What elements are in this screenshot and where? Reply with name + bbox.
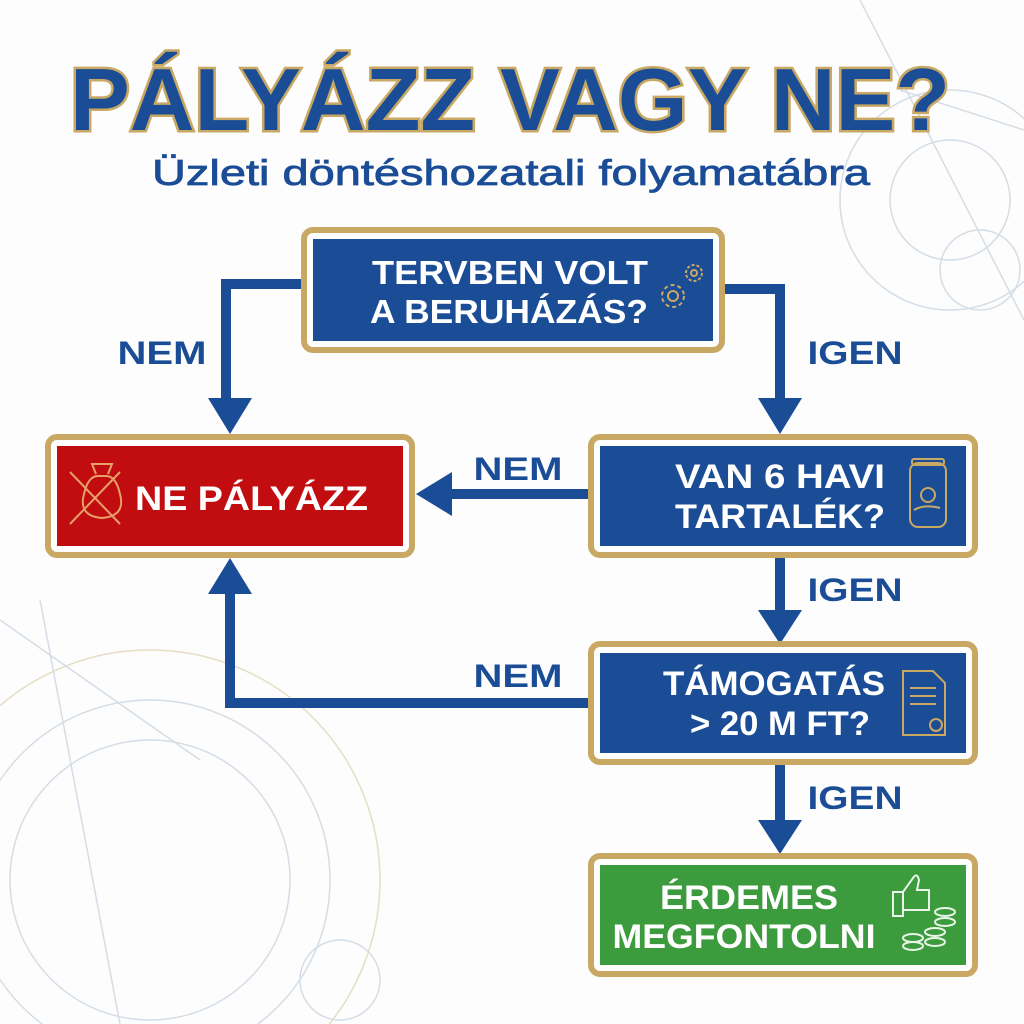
box: NE PALYAZZ: NE PÁLYÁZZ [135,480,368,518]
box: ERDEMES MEGFONTOLNI: MEGFONTOLNI [612,918,876,956]
label IGEN 1: IGEN [808,335,902,371]
arrow: TAM to NE (NEM) [208,558,592,703]
box: VAN 6 HAVI [591,437,975,555]
box: TERVBEN VOLT: TERVBEN VOLT [372,254,648,291]
title: PÁLYÁZZ VAGY NE? [70,50,950,149]
label NEM 2: NEM [474,451,562,487]
label NEM 1: NEM [118,335,206,371]
arrow: TAM to ERDEMES (IGEN) [758,762,802,854]
box: VAN 6 HAVI: TARTALÉK? [675,498,885,536]
label IGEN 3: IGEN [808,780,902,816]
box: TERVBEN VOLT: A BERUHÁZÁS? [370,293,648,330]
box: TAMOGATAS [591,644,975,762]
icon: certificate document [903,671,945,735]
label IGEN 2: IGEN [808,572,902,608]
arrow: VAN to NE (NEM) [416,472,592,516]
icon: crossed money bag [70,464,121,524]
arrow: VAN to TAM (IGEN) [758,556,802,644]
box: TAMOGATAS: TÁMOGATÁS [663,665,885,703]
arrow: box1 to VAN (IGEN) [720,289,802,434]
box: VAN 6 HAVI: VAN 6 HAVI [675,458,885,496]
icon: savings jar [910,459,946,527]
icon: thumbs up with coins [893,875,955,950]
subtitle: Üzleti döntéshozatali folyamatábra [152,152,871,193]
icon: gears [662,265,702,307]
label NEM 3: NEM [474,658,562,694]
box: ERDEMES MEGFONTOLNI [591,856,975,974]
box: NE PALYAZZ [48,437,412,555]
box: TAMOGATAS: > 20 M FT? [690,705,870,743]
arrow: box1 to NE (NEM) [208,284,305,434]
box: TERVBEN VOLT [304,230,722,350]
box: ERDEMES MEGFONTOLNI: ÉRDEMES [660,879,838,917]
